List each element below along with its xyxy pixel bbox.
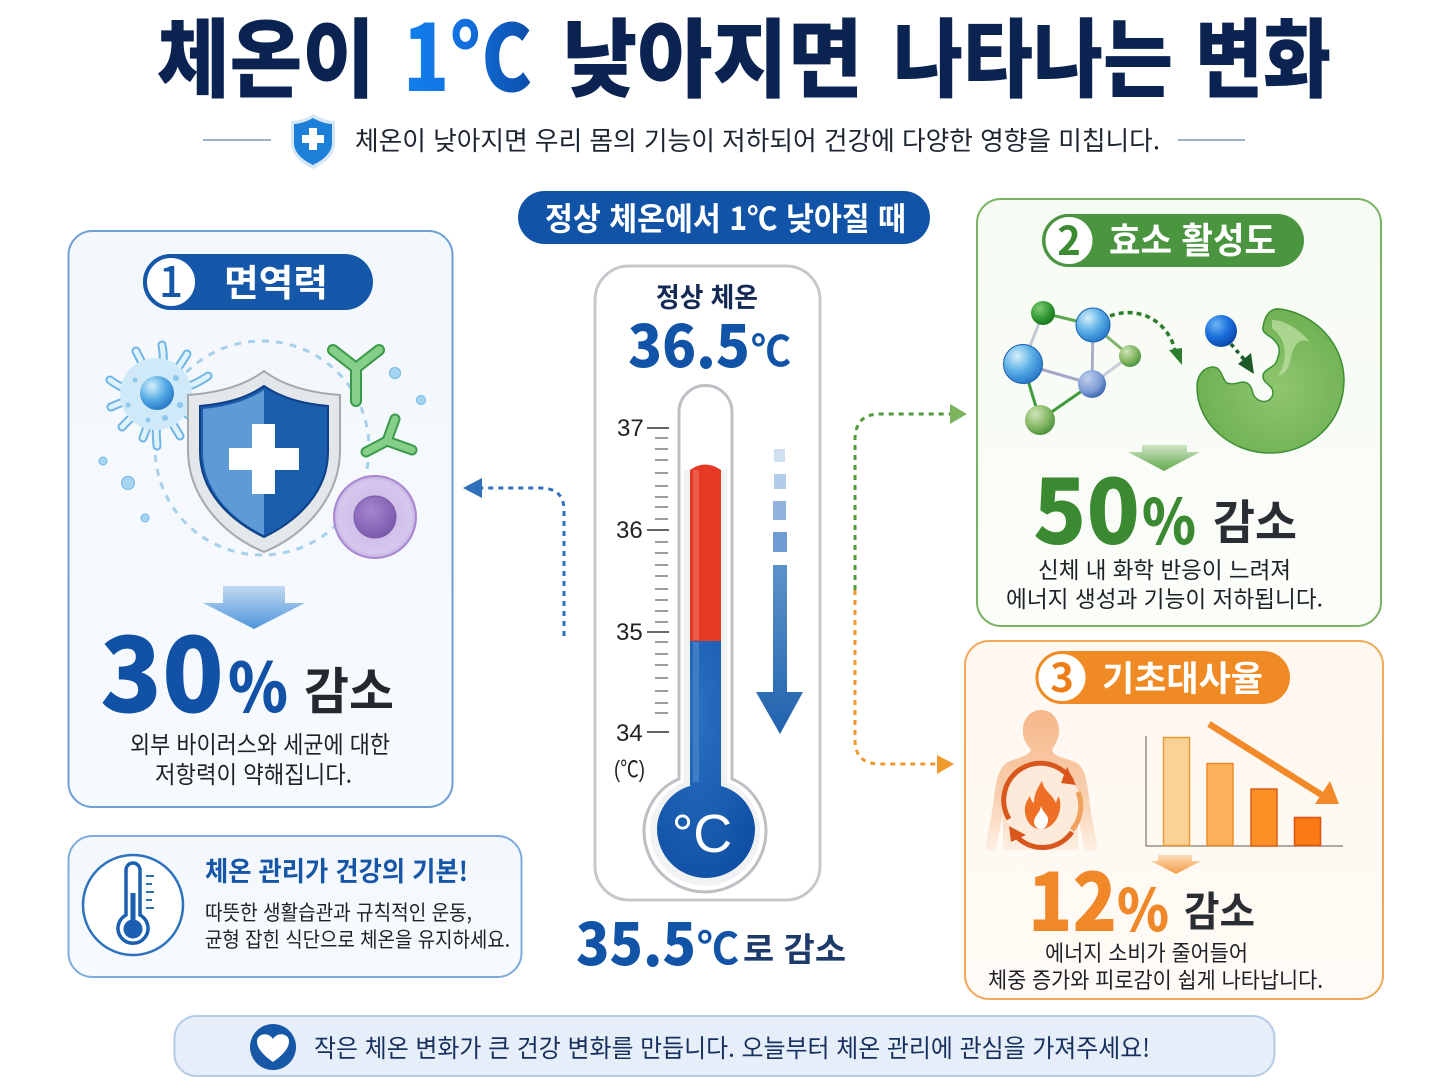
icon: substrate [1205, 315, 1254, 374]
badge: 면역력: 1 [159, 249, 183, 310]
reading: 36.5: ℃ [751, 328, 791, 375]
icon: virus [110, 345, 208, 446]
arrow: down [1151, 855, 1201, 874]
arrow: to metabolism [855, 590, 954, 774]
result: 35.5: 로 감소 [743, 923, 846, 971]
scale: (℃) [614, 756, 645, 782]
thermometer: °C [672, 804, 732, 864]
description [1006, 551, 1323, 614]
stat: 12%: 12 [1028, 839, 1117, 955]
panel: enzyme [977, 199, 1381, 626]
description: 에너지 생성과 기능이 저하됩니다. [1006, 580, 1323, 614]
footer banner [174, 1016, 1274, 1076]
panel: tip [68, 836, 522, 977]
stat: 30%: 감소 [304, 652, 394, 724]
description: 에너지 소비가 줄어들어 [1045, 936, 1248, 968]
arrow: to enzyme [855, 404, 967, 590]
panel: metabolism [965, 641, 1383, 999]
badge: 기초대사율 [1036, 646, 1290, 704]
arrow: down [203, 586, 305, 629]
stat: 12% [1028, 839, 1255, 955]
icon: antibodies [333, 350, 412, 452]
icon: shield with cross [188, 371, 340, 552]
bar chart [1146, 724, 1343, 846]
title [157, 0, 1331, 118]
stat: 30%: 30 [100, 595, 224, 742]
arrow: trend [1209, 724, 1339, 804]
subtitle: 체온이 낮아지면 우리 몸의 기능이 저하되어 건강에 다양한 영향을 미칩니다. [355, 121, 1160, 158]
center heading pill: 정상 체온에서 1℃ 낮아질 때 [545, 194, 906, 240]
panel: thermometer [595, 266, 820, 900]
result: 35.5 [576, 898, 846, 982]
stat: 30% [100, 595, 394, 742]
stat: 50%: % [1142, 472, 1196, 562]
badge: 기초대사율: 기초대사율 [1102, 651, 1263, 702]
panel: tip: 체온 관리가 건강의 기본! [205, 850, 468, 889]
description [130, 725, 390, 790]
tip text: 균형 잡힌 식단으로 체온을 유지하세요. [205, 924, 510, 954]
result: 35.5: 35.5 [576, 898, 696, 982]
subtitle [203, 114, 1245, 169]
stat: 30%: % [228, 633, 288, 732]
badge: 기초대사율: 3 [1050, 646, 1074, 704]
description [988, 936, 1323, 995]
arrow: down [1128, 445, 1200, 471]
description: 신체 내 화학 반응이 느려져 [1038, 551, 1291, 585]
tip text: 따뜻한 생활습관과 규칙적인 운동, [205, 897, 472, 927]
description: 저항력이 약해집니다. [155, 755, 352, 790]
badge: 효소 활성도 [1042, 209, 1304, 267]
stat: 12%: 감소 [1184, 878, 1255, 938]
icon: thermometer [83, 855, 183, 955]
scale: 36 [616, 517, 643, 544]
result: 35.5: ℃ [697, 925, 739, 974]
icon: bubbles [99, 368, 426, 522]
description: 외부 바이러스와 세균에 대한 [130, 725, 390, 760]
tip text [205, 897, 510, 954]
panel: immunity [68, 231, 452, 807]
arrow: to immunity [463, 478, 564, 636]
icon: body with flame [986, 710, 1097, 852]
badge: 효소 활성도: 2 [1057, 209, 1081, 267]
icon: subtitle shield [291, 114, 335, 169]
reading: 36.5: 36.5 [628, 300, 750, 384]
icon: heart [250, 1024, 296, 1070]
badge: 면역력 [143, 249, 373, 310]
arrow: molecule to enzyme [1110, 313, 1182, 365]
scale: 34 [616, 720, 643, 747]
arrow: falling [756, 449, 803, 734]
badge: 면역력: 면역력 [224, 253, 328, 307]
panel: thermometer: 정상 체온 [656, 276, 758, 315]
scale [614, 405, 669, 782]
dashed ring [155, 341, 369, 555]
badge: 효소 활성도: 효소 활성도 [1109, 212, 1276, 264]
description: 체중 증가와 피로감이 쉽게 나타납니다. [988, 963, 1323, 995]
footer banner: 작은 체온 변화가 큰 건강 변화를 만듭니다. 오늘부터 체온 관리에 관심을 가져주세요! [314, 1029, 1150, 1065]
stat: 50%: 50 [1033, 441, 1140, 570]
stat: 50% [1033, 441, 1297, 570]
icon: flame [1025, 781, 1060, 829]
scale: 37 [617, 415, 644, 442]
thermometer [644, 386, 766, 892]
icon: purple cell [334, 476, 416, 558]
stat: 12%: % [1117, 864, 1169, 948]
scale: 35 [616, 619, 643, 646]
stat: 50%: 감소 [1213, 484, 1297, 553]
icon: enzyme [1197, 309, 1344, 453]
icon: molecule [1004, 301, 1141, 435]
